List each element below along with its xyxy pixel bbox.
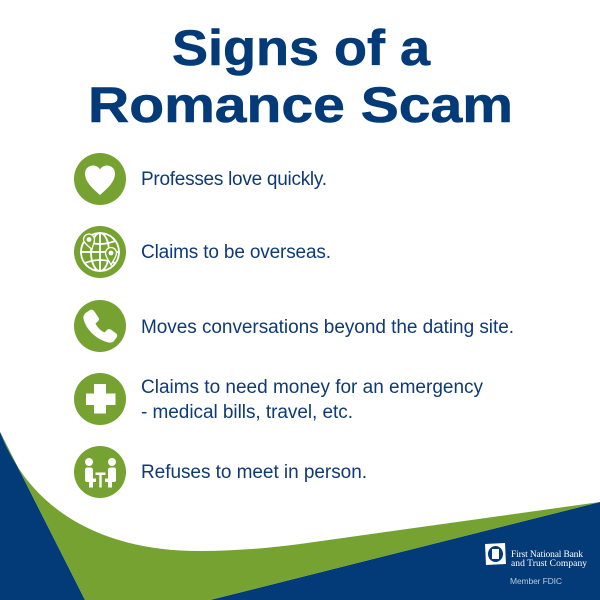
logo: First National Bank and Trust Company: and Trust Company: [511, 559, 587, 569]
icon: medical cross: [74, 373, 126, 425]
icon: heart: [74, 153, 126, 205]
member FDIC text: Member FDIC: [510, 576, 562, 586]
list item text: conversations: Moves conversations beyond the dating site.: [141, 317, 514, 338]
list item text: overseas: Claims to be overseas.: [141, 242, 331, 263]
title: Signs of a: [172, 20, 431, 76]
logo: First National Bank and Trust Company: First National Bank: [511, 550, 583, 560]
list item text: professes love: Professes love quickly.: [141, 169, 327, 190]
icon: telephone: [74, 300, 126, 352]
list item text: emergency: [141, 377, 484, 423]
bottom wave: green swoosh: [0, 432, 600, 600]
list item text: emergency: - medical bills, travel, etc.: [141, 402, 353, 423]
title: Romance Scam: [88, 77, 513, 133]
icon: two people at a table: [74, 446, 126, 498]
list item text: emergency: Claims to need money for an emergency: [141, 377, 484, 398]
title: [88, 20, 513, 133]
logo: First National Bank and Trust Company: [485, 543, 587, 569]
list item text: refuses to meet: Refuses to meet in person.: [141, 462, 367, 483]
bottom wave: navy right: [210, 502, 600, 600]
bottom wave: navy base: [0, 432, 85, 600]
icon: globe with map pins: [74, 226, 126, 278]
